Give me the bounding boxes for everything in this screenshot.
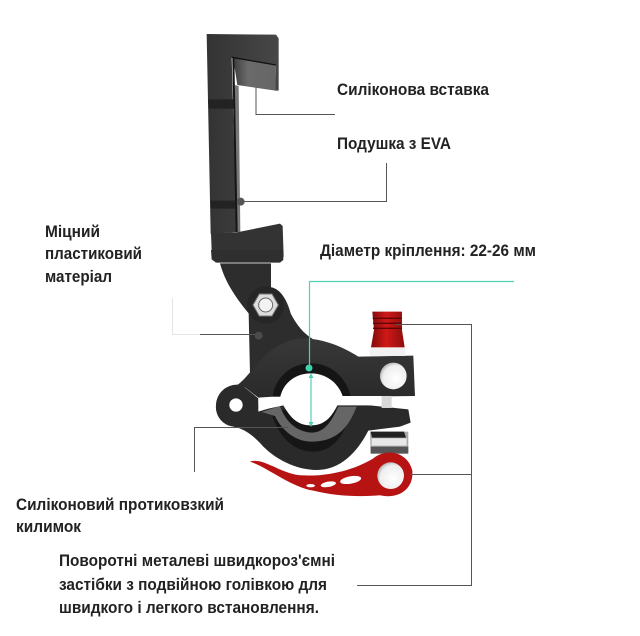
label: plastic material: Міцний (45, 222, 100, 241)
leader line: silicone insert (256, 87, 335, 114)
bolt shaft (382, 396, 392, 408)
swivel arm (220, 263, 313, 373)
label: quick release: Поворотні металеві швидкороз'ємні (59, 551, 335, 570)
cross hole (380, 363, 407, 389)
bracket base (211, 250, 283, 263)
hinge hole (229, 398, 243, 412)
label: quick release: застібки з подвійною голівкою для (59, 575, 327, 594)
leader line: quick release (357, 324, 472, 586)
leader line: plastic material (172, 298, 255, 334)
diameter marker (306, 282, 514, 427)
phone holder (207, 34, 284, 260)
red lever (250, 452, 412, 496)
lower silicone ring (272, 409, 351, 452)
red knob (371, 312, 405, 347)
label: silicone insert: Силіконова вставка (337, 80, 489, 99)
label: plastic material: матеріал (45, 267, 112, 286)
holder bands (208, 99, 235, 209)
lower clamp jaw (216, 385, 411, 470)
upper clamp jaw (237, 339, 415, 398)
label: quick release (59, 551, 335, 617)
bolt nut (247, 286, 284, 324)
washers (370, 432, 408, 454)
upper silicone ring (273, 363, 351, 397)
holder spine and top arm (207, 34, 279, 234)
white collar (370, 348, 405, 356)
label: silicone mat: килимок (16, 517, 81, 536)
leader line: EVA pad (240, 163, 386, 202)
label: plastic material: пластиковий (45, 244, 142, 263)
label: plastic material (45, 222, 142, 286)
clamp bore and slot (258, 373, 382, 425)
clamp assembly (211, 250, 415, 496)
label: EVA pad: Подушка з EVA (337, 134, 451, 153)
leader line: silicone mat (194, 428, 288, 472)
label: mount diameter: Діаметр кріплення: 22-26 мм (320, 241, 536, 260)
EVA pad (237, 198, 245, 206)
label: silicone mat (16, 495, 224, 536)
lower jaw (211, 224, 284, 260)
silicone insert (232, 58, 276, 91)
arm rivet (255, 332, 263, 340)
label: silicone mat: Силіконовий протиковзкий (16, 495, 224, 514)
label: quick release: швидкого і легкого встановлення. (59, 598, 319, 617)
